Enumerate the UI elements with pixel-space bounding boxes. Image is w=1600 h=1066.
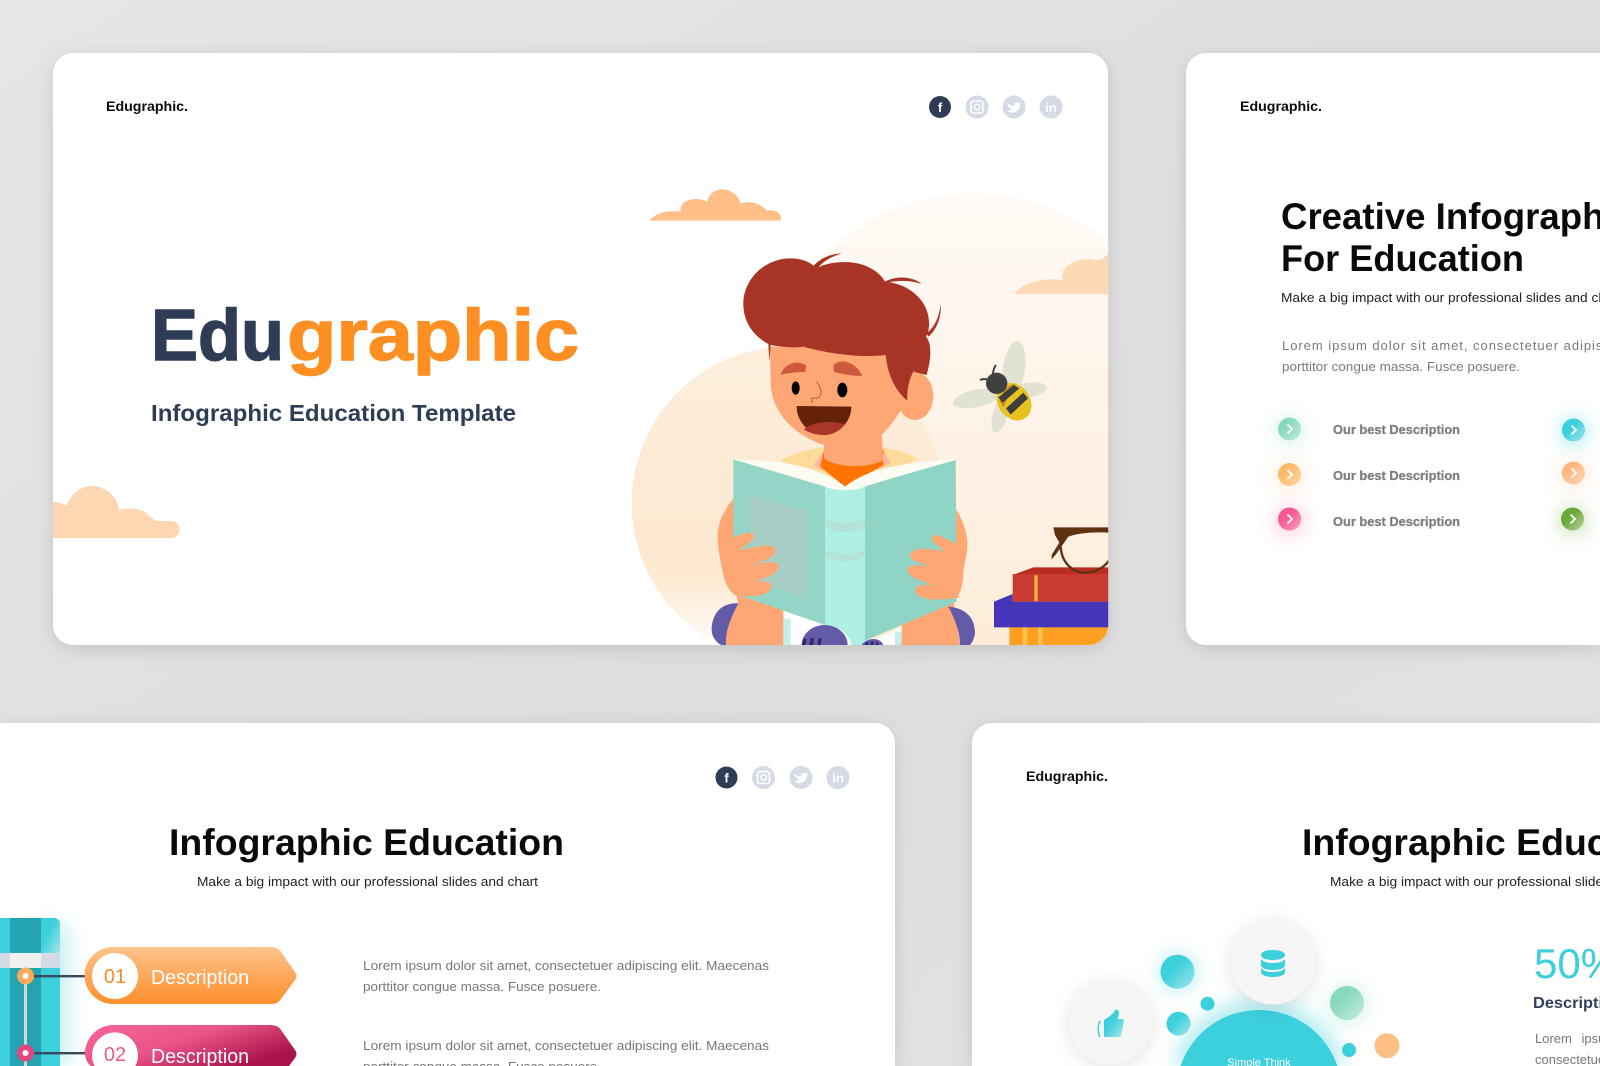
heading: For Education: [1281, 238, 1524, 279]
brand logo: Edugraphic.: [1026, 768, 1108, 784]
cloud right: [1014, 253, 1108, 294]
boy: [712, 253, 975, 668]
panel: creative infographic slide: [1186, 53, 1600, 645]
brand logo: Edugraphic.: [1240, 98, 1322, 114]
shoes: [800, 622, 853, 668]
tag 01: 01: [104, 966, 126, 988]
heading: [1281, 196, 1600, 279]
icon: thumbs up: [1069, 982, 1152, 1064]
title: Edugraphic: Edu: [151, 296, 284, 376]
list: right column bullets: [1558, 417, 1589, 536]
social icons: f: [724, 770, 729, 786]
timeline connector 01: [17, 968, 86, 984]
list: left column: Our best Description: [1333, 468, 1460, 483]
arms: [718, 498, 736, 595]
heading: Infographic Education: [169, 822, 564, 863]
subheading: Make a big impact with our professional slides and chart: [197, 874, 538, 889]
tag 01: Description: [151, 967, 249, 989]
panel: infographic education timeline slide: [0, 723, 895, 1066]
panel: title slide: [53, 53, 1183, 668]
tag 02: 02: [104, 1044, 126, 1066]
cloud top: [649, 189, 781, 221]
illustration: boy reading book: [632, 189, 1108, 645]
subheading: Make a big impact with our professional slides and chart: [1281, 290, 1600, 305]
subtitle: Infographic Education Template: [151, 400, 516, 426]
main bubble: [1180, 1010, 1338, 1066]
list: left column: Our best Description: [1333, 514, 1460, 529]
hands: [730, 532, 779, 596]
list: left column: Our best Description: [1333, 422, 1460, 437]
body text 02: [363, 1038, 770, 1066]
legs: [726, 590, 783, 645]
brand logo: Edugraphic.: [106, 98, 188, 114]
cloud left: [53, 486, 180, 538]
timeline connector 02: [17, 1044, 86, 1062]
book: [733, 459, 825, 625]
title: Edugraphic: [151, 296, 579, 376]
title: Edugraphic: graphic: [287, 296, 579, 376]
stat body text: [1535, 1031, 1600, 1066]
social icons: in: [1045, 100, 1057, 115]
books and glasses: [994, 527, 1109, 646]
body text 01: [363, 958, 770, 994]
body text: [1282, 338, 1600, 374]
bee: [951, 340, 1048, 435]
social icons: [716, 766, 850, 789]
panel: bubble chart slide: [972, 723, 1600, 1066]
social icons: in: [832, 770, 844, 786]
book spine graphic: [0, 918, 70, 1066]
icon: database: [1232, 922, 1314, 1004]
body text: porttitor congue massa. Fusce posuere.: [1282, 359, 1520, 374]
body text 02: Lorem ipsum dolor sit amet, consectetuer adipiscing elit. Maecenas: [363, 1038, 770, 1053]
body text 01: porttitor congue massa. Fusce posuere.: [363, 979, 601, 994]
social icons: [929, 96, 1062, 118]
socks: [783, 610, 902, 645]
list: left column: [1274, 416, 1460, 536]
tag 02: [85, 1025, 297, 1066]
tag 01: [84, 947, 296, 1004]
social icons: f: [938, 100, 943, 115]
body text 01: Lorem ipsum dolor sit amet, consectetuer adipiscing elit. Maecenas: [363, 958, 770, 973]
bubble glow: [1158, 952, 1367, 1066]
small bubbles: [1160, 955, 1400, 1058]
